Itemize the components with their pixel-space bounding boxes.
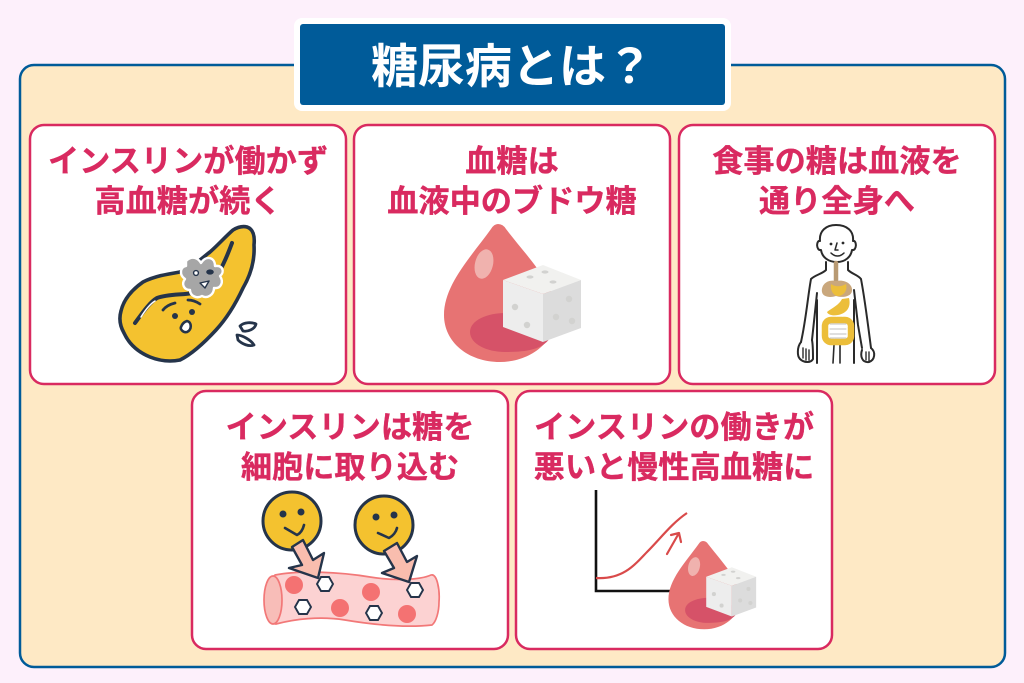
heading: card 4 bbox=[226, 410, 474, 485]
panel: food sugar travels through blood bbox=[679, 125, 995, 384]
panel: blood sugar is glucose bbox=[354, 125, 670, 384]
heading: card 4: インスリンは糖を bbox=[226, 410, 474, 445]
heading: card 1 bbox=[48, 144, 328, 219]
heading: card 3 bbox=[712, 144, 962, 219]
panel: insulin not working bbox=[30, 125, 346, 384]
icon: insulin faces with arrows bbox=[263, 492, 417, 582]
heading: card 3: 通り全身へ bbox=[759, 184, 915, 219]
heading: card 4: 細胞に取り込む bbox=[241, 450, 459, 485]
heading: card 5: 悪いと慢性高血糖に bbox=[534, 450, 814, 485]
icon: human body with organs bbox=[798, 225, 874, 363]
heading: card 3: 食事の糖は血液を bbox=[712, 144, 962, 179]
line chart: rising blood sugar bbox=[596, 490, 687, 591]
title banner: 糖尿病とは？ bbox=[371, 40, 653, 93]
heading: card 5 bbox=[534, 410, 814, 485]
heading: card 1: 高血糖が続く bbox=[94, 184, 282, 219]
panel: chronic high blood sugar bbox=[516, 391, 832, 649]
heading: card 2 bbox=[387, 144, 637, 219]
heading: card 5: インスリンの働きが bbox=[534, 410, 814, 445]
title banner bbox=[294, 18, 731, 111]
icon: blood drop with sugar cube bbox=[444, 224, 581, 362]
heading: card 2: 血液中のブドウ糖 bbox=[387, 184, 637, 219]
icon: glucose hexagons bbox=[295, 577, 423, 620]
icon: blood vessel bbox=[264, 572, 439, 626]
panel: insulin moves sugar into cells bbox=[192, 391, 508, 649]
heading: card 1: インスリンが働かず bbox=[48, 144, 328, 179]
heading: card 2: 血糖は bbox=[465, 144, 559, 179]
icon: blood drop with sugar cube small bbox=[668, 541, 756, 629]
icon: pancreas bbox=[120, 227, 256, 361]
